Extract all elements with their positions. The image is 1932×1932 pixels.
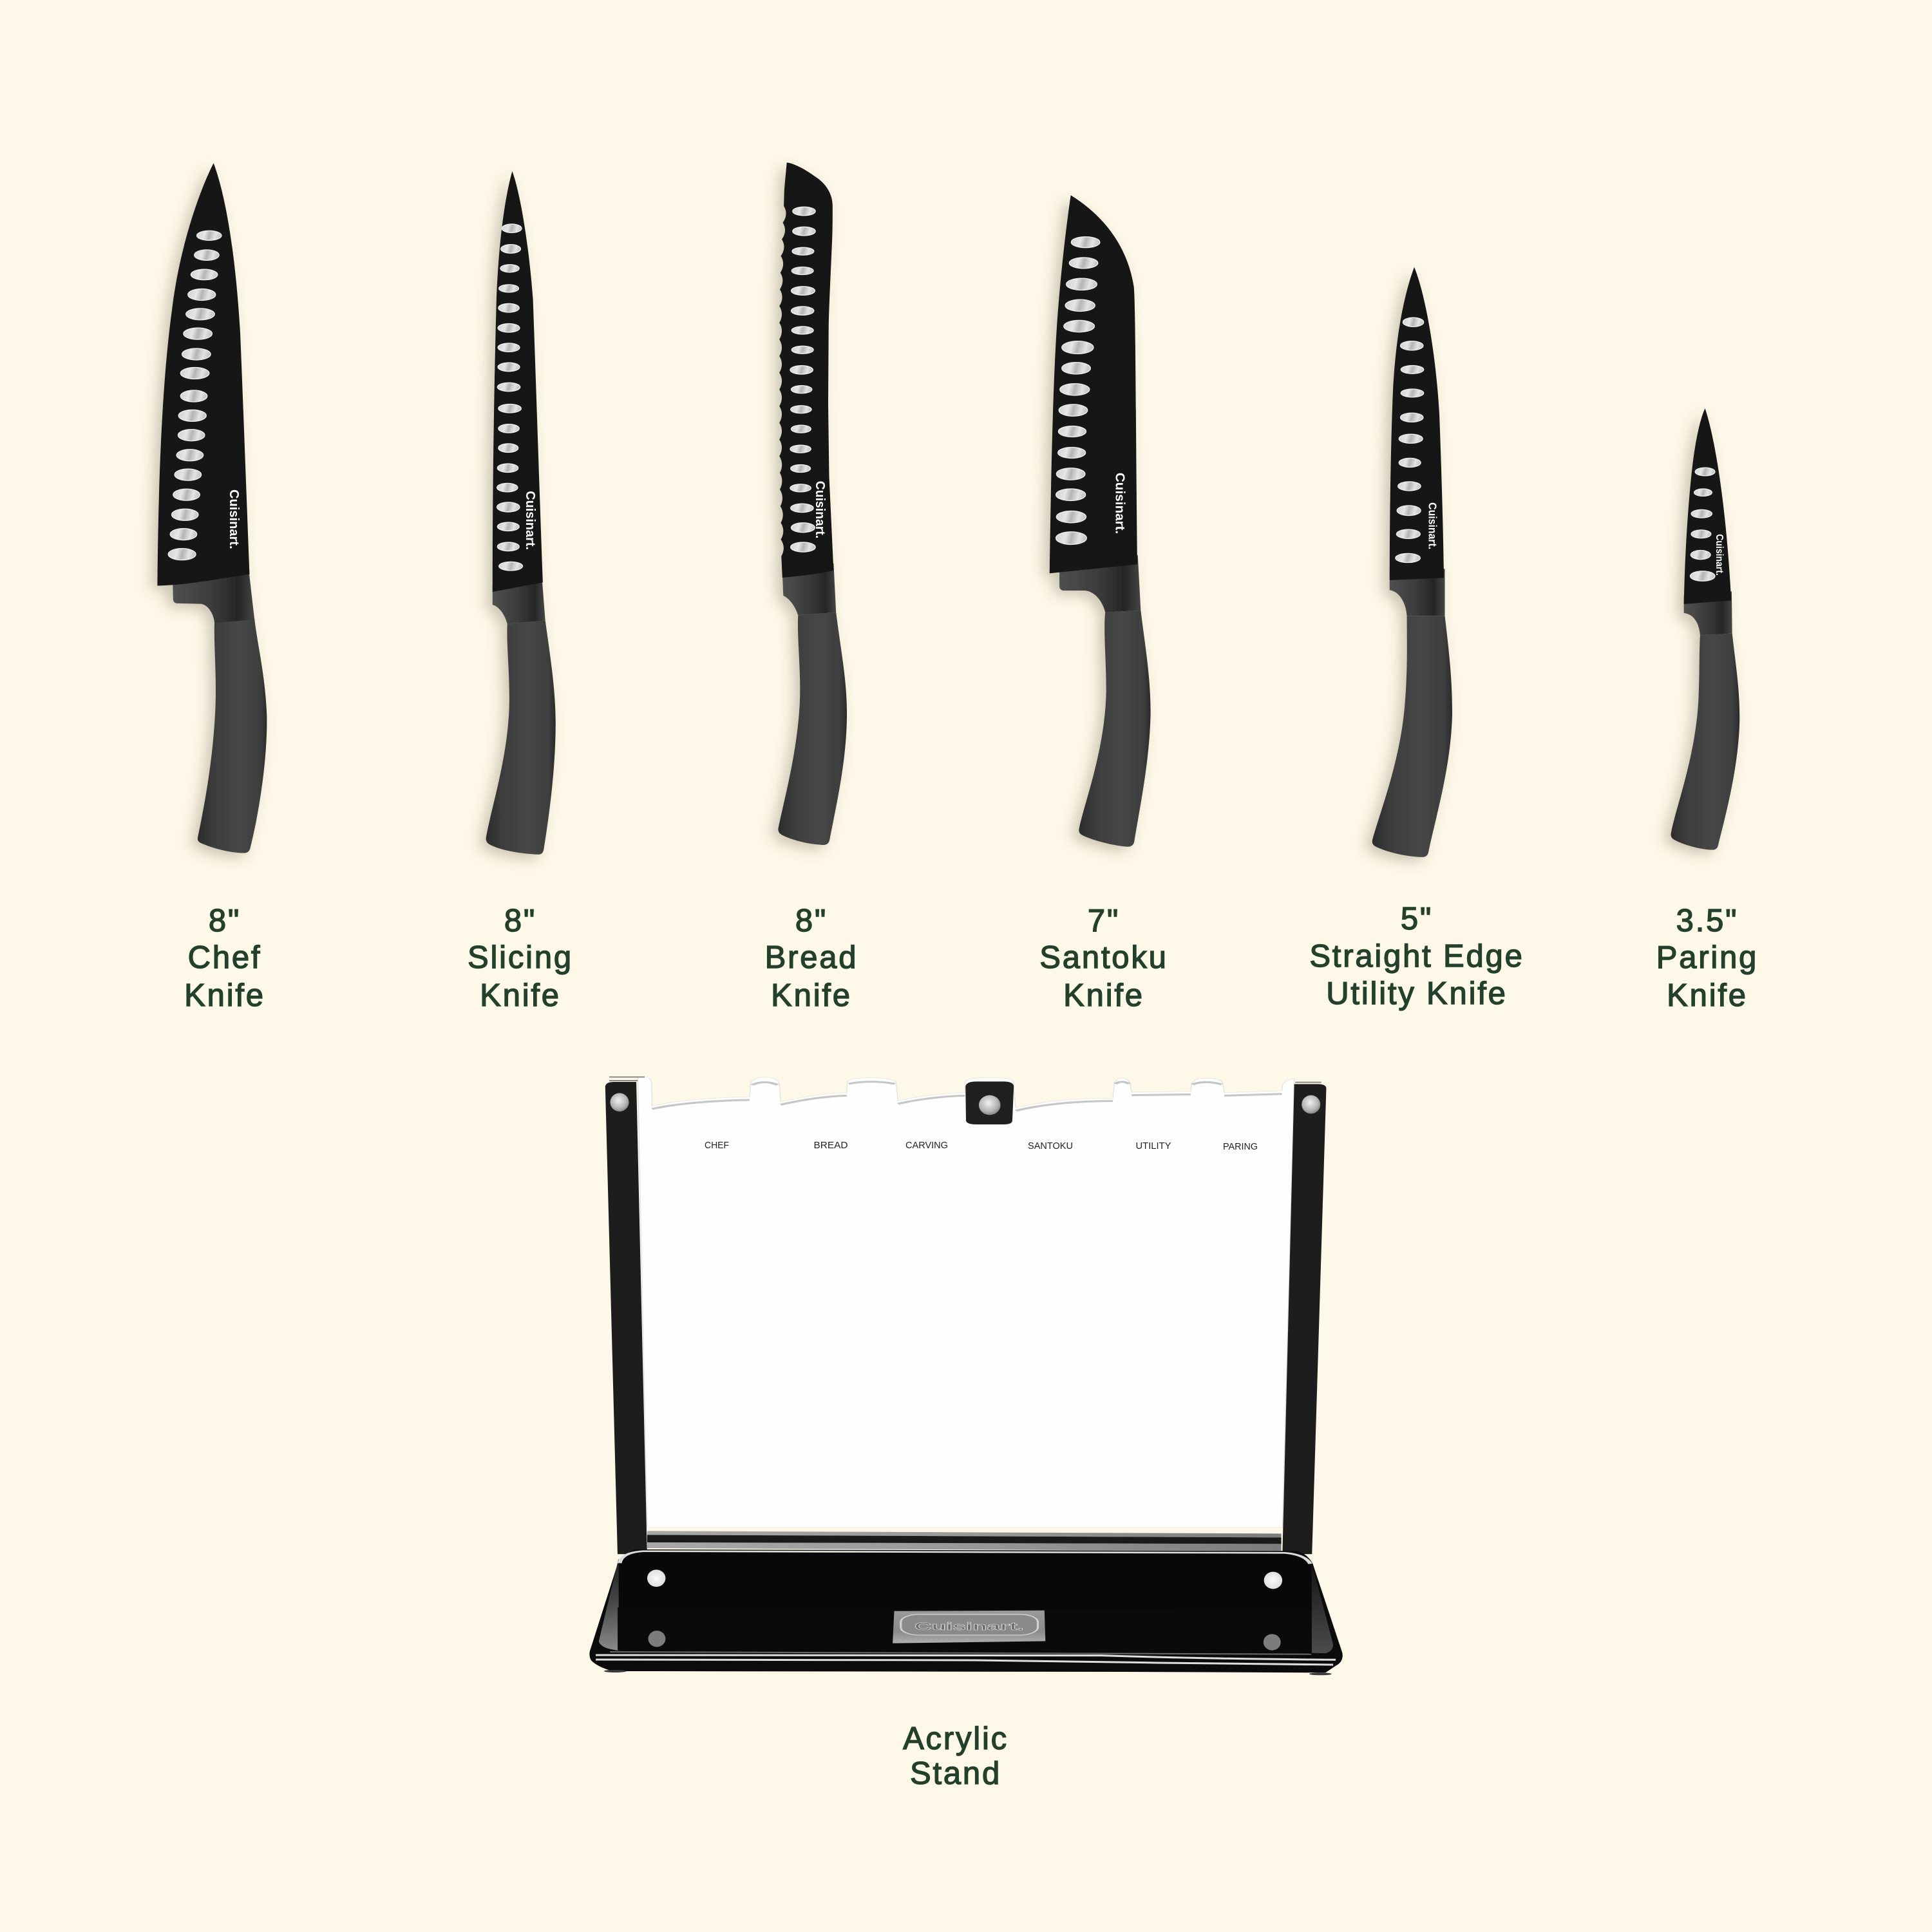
label: Slicing (468, 940, 573, 975)
slot names: BREAD (814, 1141, 848, 1151)
blade hollows (168, 231, 222, 560)
label: Acrylic (903, 1721, 1009, 1756)
back plate (619, 1551, 1311, 1611)
label: Santoku (1039, 940, 1168, 975)
acrylic board and posts (605, 1077, 1326, 1554)
base side reflections (599, 1558, 619, 1651)
blade hollows (497, 224, 522, 571)
slot names (705, 1141, 1258, 1152)
label: 8" (795, 904, 828, 938)
blade (1390, 267, 1444, 580)
illustration: paring knife (1671, 408, 1739, 850)
label: Knife (771, 978, 852, 1013)
label: Knife (184, 978, 265, 1013)
label: 8" (209, 904, 241, 938)
panel: acrylic stand (589, 1077, 1343, 1791)
blade hollows (1396, 317, 1424, 562)
slot names: CARVING (905, 1141, 948, 1151)
label: 8" (504, 904, 536, 938)
label: 7" (1088, 904, 1120, 938)
panel: 8 inch slicing knife (468, 171, 573, 1013)
panel: 8 inch chef knife (157, 163, 267, 1013)
panel: 3.5 inch paring knife (1656, 408, 1758, 1013)
slot names: UTILITY (1136, 1141, 1171, 1151)
screw reflections (649, 1631, 1281, 1651)
blade (1050, 195, 1137, 573)
label: Straight Edge (1309, 939, 1524, 974)
label: Paring (1656, 940, 1758, 975)
slot names: SANTOKU (1028, 1141, 1073, 1151)
center clip (965, 1081, 1014, 1124)
handle (486, 620, 556, 855)
bolster (173, 568, 254, 623)
bolster (1684, 591, 1732, 635)
bolster (782, 564, 836, 615)
acrylic board (638, 1077, 1294, 1528)
illustration: bread knife (778, 163, 847, 845)
plate lettering: Cuisinart. (914, 1620, 1024, 1633)
brand mark: Cuisinart. (523, 491, 537, 550)
right post (1282, 1084, 1326, 1554)
post caps (609, 1077, 1321, 1083)
handle (1671, 634, 1739, 850)
base screws (647, 1569, 1282, 1589)
label: Bread (765, 940, 858, 975)
label: Knife (1667, 978, 1748, 1013)
left post (605, 1082, 647, 1554)
label: Chef (188, 940, 261, 975)
handle (778, 612, 847, 845)
panel: 8 inch bread knife (765, 163, 858, 1013)
brand plate (893, 1611, 1045, 1643)
bolster (1059, 555, 1141, 612)
base body (589, 1549, 1343, 1672)
screws (610, 1093, 1320, 1115)
illustration: chef knife (157, 163, 267, 853)
illustration: slicing knife (486, 171, 556, 855)
handle (1079, 611, 1151, 847)
front tray (618, 1607, 1311, 1653)
blade (493, 171, 543, 592)
feet (604, 1670, 1332, 1675)
bolster (493, 576, 545, 624)
illustration: santoku knife (1050, 195, 1151, 847)
blade hollows (790, 207, 815, 552)
serrated blade (779, 163, 833, 578)
acrylic edge bevel (652, 1082, 1282, 1111)
brand mark: Cuisinart. (227, 489, 241, 549)
panel: 5 inch straight edge utility knife (1309, 267, 1524, 1011)
label: Utility Knife (1326, 976, 1508, 1011)
bolster (1390, 569, 1445, 616)
illustration: utility knife (1372, 267, 1452, 857)
stand base (589, 1531, 1343, 1675)
blade (1684, 408, 1731, 604)
brand mark: Cuisinart. (1112, 473, 1127, 534)
label: 3.5" (1676, 904, 1738, 938)
rear bands (647, 1531, 1281, 1551)
slot names: CHEF (705, 1141, 729, 1151)
slot names: PARING (1223, 1142, 1258, 1152)
label: 5" (1401, 902, 1433, 936)
brand mark: Cuisinart. (813, 481, 827, 538)
edge highlights (620, 1551, 1311, 1564)
label: Knife (1063, 978, 1144, 1013)
handle (1372, 616, 1452, 857)
brand plate inset (901, 1615, 1037, 1635)
label: Stand (910, 1756, 1001, 1791)
blade hollows (1056, 237, 1100, 544)
panel: 7 inch santoku knife (1039, 195, 1168, 1013)
brand mark: Cuisinart. (1426, 502, 1439, 549)
brand mark: Cuisinart. (1714, 534, 1725, 576)
label: Knife (480, 978, 561, 1013)
blade (157, 163, 249, 585)
handle (198, 619, 267, 853)
blade hollows (1690, 468, 1715, 581)
